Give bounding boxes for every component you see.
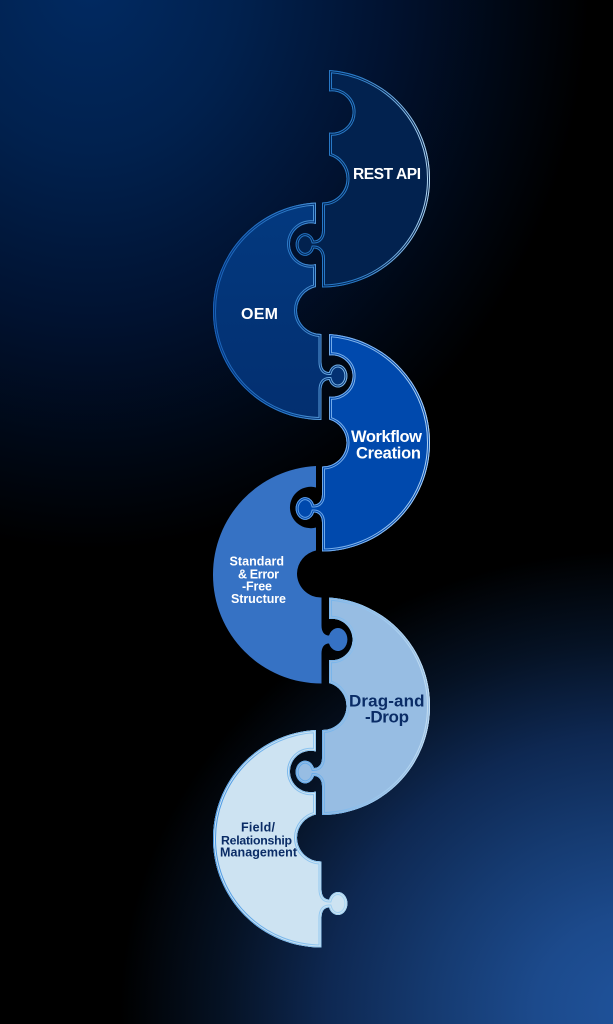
panel: OEM piece: OEM — [241, 306, 278, 323]
panel: Standard and Error-Free Structure piece: Structure — [231, 592, 286, 606]
panel: Drag-and-Drop piece: Drag-and — [349, 692, 424, 711]
panel: Standard and Error-Free Structure piece: Standard — [230, 555, 284, 569]
panel: Field/Relationship Management piece: Field/ — [241, 821, 276, 835]
panel: Workflow Creation piece: Workflow — [351, 428, 422, 446]
panel: Standard and Error-Free Structure piece: -Free — [242, 580, 272, 594]
panel: Field/Relationship Management piece: Relationship — [221, 834, 292, 848]
panel: Workflow Creation piece: Creation — [356, 444, 421, 462]
panel: REST API piece — [296, 70, 430, 288]
panel: Drag-and-Drop piece — [296, 598, 430, 815]
panel: Drag-and-Drop piece: -Drop — [365, 708, 409, 727]
panel: Field/Relationship Management piece: Management — [220, 846, 298, 860]
panel: REST API piece: REST API — [353, 166, 421, 183]
panel: Workflow Creation piece — [296, 334, 430, 552]
panel: Field/Relationship Management piece — [213, 730, 347, 948]
panel: Standard and Error-Free Structure piece — [213, 466, 347, 684]
panel: Standard and Error-Free Structure piece: & Error — [238, 567, 279, 581]
panel: OEM piece — [213, 202, 347, 420]
